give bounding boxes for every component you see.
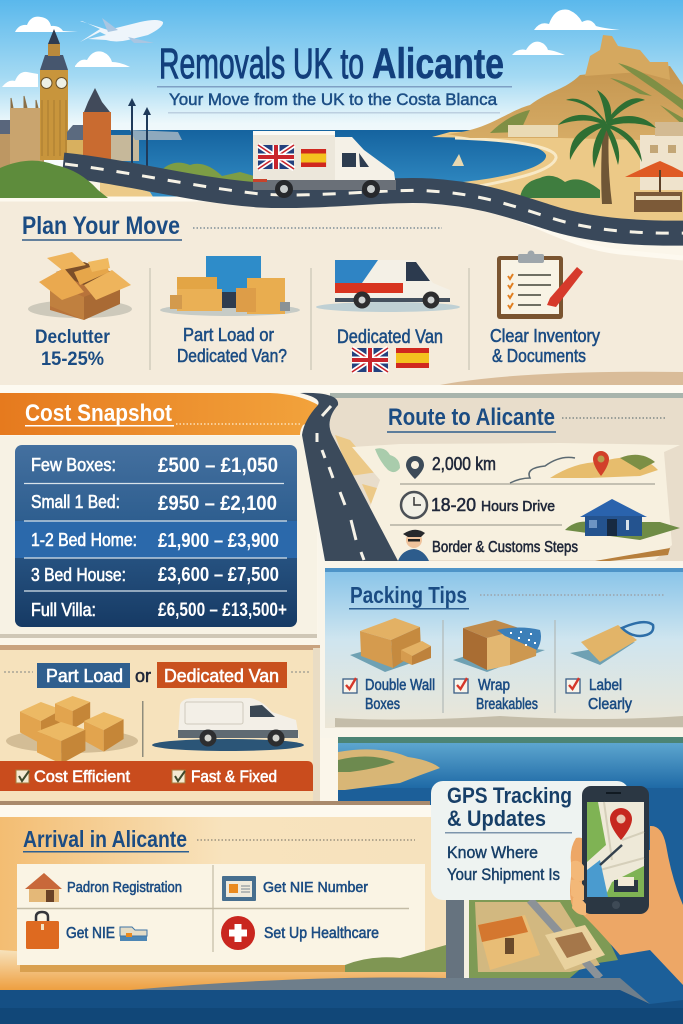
title: Alicante bbox=[372, 40, 504, 88]
item: declutter bbox=[28, 252, 132, 370]
item: part load or dedicated van: Dedicated Van? bbox=[177, 346, 287, 366]
row: 1-2 bed home: 1-2 Bed Home: bbox=[31, 530, 137, 550]
icon: umbrella and table bbox=[625, 161, 683, 212]
row: full villa: £6,500 – £13,500+ bbox=[158, 600, 287, 621]
step: padron registration bbox=[25, 873, 182, 902]
row: small 1 bed bbox=[31, 492, 277, 515]
item: dedicated van bbox=[316, 260, 460, 372]
tip: wrap breakables: Breakables bbox=[476, 696, 538, 713]
hill with castle bbox=[447, 35, 683, 180]
checkbox bbox=[454, 678, 468, 693]
item: clear inventory: & Documents bbox=[492, 346, 586, 366]
map patches bbox=[335, 435, 398, 520]
coast and aerial map scene bbox=[338, 737, 683, 1024]
road across hero bbox=[63, 164, 683, 233]
heading: Cost Snapshot bbox=[25, 400, 172, 427]
clouds bbox=[2, 10, 620, 87]
item: clear inventory bbox=[490, 250, 600, 366]
icon: white van bbox=[152, 698, 304, 751]
tip: label clearly: Label bbox=[589, 677, 622, 694]
vertical road bbox=[446, 900, 464, 978]
tip: wrap breakables: Wrap bbox=[478, 677, 510, 694]
orange banner bbox=[0, 393, 320, 435]
icon: clipboard bbox=[497, 250, 583, 319]
item: drive time bbox=[401, 492, 680, 540]
body text: Know Where bbox=[447, 843, 538, 862]
bushes mid bbox=[160, 163, 254, 186]
title: Removals UK to bbox=[159, 40, 364, 88]
subtitle: Your Move from the UK to the Costa Blanca bbox=[169, 90, 498, 109]
boat bbox=[452, 154, 464, 166]
item: drive time: 18-20 bbox=[431, 495, 476, 515]
panel: cost snapshot bbox=[0, 393, 320, 638]
body text bbox=[447, 843, 560, 884]
tip: wrap breakables bbox=[453, 620, 545, 713]
row: few boxes bbox=[31, 454, 278, 477]
icon: house bbox=[565, 499, 680, 540]
icon: small folder bbox=[120, 927, 147, 941]
row: 3 bed house: £3,600 – £7,500 bbox=[158, 564, 279, 586]
right column backdrop bbox=[318, 393, 683, 738]
icon: clock bbox=[401, 492, 427, 518]
hand bbox=[570, 826, 683, 985]
hand holding phone bbox=[570, 786, 683, 985]
step: get nie: Get NIE bbox=[66, 925, 115, 942]
highlighted row bbox=[15, 521, 297, 558]
icon: open box bbox=[28, 252, 132, 320]
icon: map pin bbox=[406, 456, 424, 479]
chip: dedicated van: Dedicated Van bbox=[164, 666, 279, 686]
hero scene bbox=[0, 0, 683, 235]
row: 1-2 bed home: £1,900 – £3,900 bbox=[158, 530, 279, 552]
panel background bbox=[0, 199, 683, 385]
sky bbox=[0, 0, 683, 172]
panel: plan your move bbox=[0, 199, 683, 385]
step: set up healthcare bbox=[221, 916, 379, 950]
title bbox=[157, 40, 512, 109]
tip: label clearly bbox=[566, 622, 653, 713]
icon: plane bbox=[80, 18, 163, 43]
panel: part load or dedicated van bbox=[0, 645, 430, 806]
row: 3 bed house bbox=[31, 564, 279, 586]
step: get nie number bbox=[222, 876, 368, 901]
icon: flags bbox=[352, 348, 429, 372]
icon: wrapped box bbox=[453, 620, 545, 672]
item: drive time: Hours Drive bbox=[481, 498, 555, 515]
or: or bbox=[135, 666, 151, 686]
cost table bbox=[15, 445, 297, 627]
step: set up healthcare: Set Up Healthcare bbox=[264, 925, 379, 942]
icon: customs officer bbox=[398, 530, 429, 561]
icon: luggage tag bbox=[570, 622, 653, 665]
item: fast and fixed: Fast & Fixed bbox=[191, 768, 277, 786]
checkbox bbox=[566, 678, 580, 693]
tip: double wall boxes bbox=[343, 618, 435, 713]
row: 1-2 bed home bbox=[31, 530, 279, 552]
benefits bar bbox=[0, 761, 313, 791]
bush left bbox=[0, 161, 108, 198]
icon: phone bbox=[582, 786, 649, 914]
item: customs bbox=[398, 530, 670, 561]
icon: cardboard boxes bbox=[350, 618, 431, 672]
icon: red white blue van bbox=[316, 260, 460, 312]
item: part load or dedicated van bbox=[160, 256, 300, 366]
tip: double wall boxes: Double Wall bbox=[365, 677, 435, 694]
icon: id card bbox=[222, 876, 256, 901]
heading: Route to Alicante bbox=[388, 404, 555, 431]
aerial houses bbox=[468, 900, 618, 978]
Big Ben and Westminster bbox=[0, 29, 182, 170]
heading: Arrival in Alicante bbox=[23, 826, 187, 852]
lamp posts bbox=[128, 98, 151, 167]
row: few boxes: Few Boxes: bbox=[31, 455, 116, 475]
map pin bbox=[610, 808, 632, 840]
icon: boxes and blue van bbox=[160, 256, 300, 316]
torn paper bbox=[352, 443, 680, 560]
panel: gps tracking bbox=[431, 781, 629, 900]
step: get nie bbox=[26, 912, 147, 949]
heading: Plan Your Move bbox=[22, 212, 180, 240]
icon: house bbox=[25, 873, 62, 902]
icon: briefcase bbox=[26, 912, 59, 949]
chip: dedicated van bbox=[157, 662, 287, 688]
row: 3 bed house: 3 Bed House: bbox=[31, 565, 126, 585]
chip: part load bbox=[37, 663, 130, 688]
item: distance bbox=[406, 451, 658, 483]
buildings right bbox=[640, 122, 683, 190]
green map blob bbox=[375, 448, 400, 472]
chip: part load: Part Load bbox=[46, 666, 123, 686]
item: cost efficient: Cost Efficient bbox=[34, 768, 130, 786]
row: few boxes: £500 – £1,050 bbox=[158, 454, 278, 477]
body text: Your Shipment Is bbox=[447, 865, 560, 884]
row: full villa bbox=[31, 600, 287, 621]
tip: double wall boxes: Boxes bbox=[365, 696, 400, 713]
icon: palm tree bbox=[558, 90, 656, 204]
road to route panel bbox=[300, 393, 398, 561]
sea bbox=[100, 130, 570, 210]
item: customs: Border & Customs Steps bbox=[432, 539, 578, 556]
heading: & Updates bbox=[447, 806, 546, 831]
footer sea band bbox=[0, 990, 683, 1024]
row: full villa: Full Villa: bbox=[31, 600, 96, 620]
checkbox bbox=[343, 678, 357, 693]
item: part load or dedicated van: Part Load or bbox=[183, 325, 274, 345]
heading: GPS Tracking bbox=[447, 783, 572, 808]
heading bbox=[447, 783, 572, 831]
item: dedicated van: Dedicated Van bbox=[337, 327, 443, 348]
row: small 1 bed: Small 1 Bed: bbox=[31, 492, 120, 512]
delivery truck bbox=[253, 131, 396, 198]
item: clear inventory: Clear Inventory bbox=[490, 326, 600, 346]
flag: UK bbox=[258, 145, 294, 169]
item: distance: 2,000 km bbox=[432, 454, 496, 474]
steps card bbox=[17, 864, 425, 965]
step: get nie number: Get NIE Number bbox=[263, 879, 368, 896]
tip: label clearly: Clearly bbox=[588, 696, 632, 713]
row: small 1 bed: £950 – £2,100 bbox=[158, 492, 277, 515]
fingers bbox=[571, 861, 586, 915]
item: declutter: 15-25% bbox=[41, 349, 104, 370]
panel: route to alicante bbox=[330, 393, 683, 561]
white separator band bbox=[0, 385, 683, 393]
item: declutter: Declutter bbox=[35, 327, 111, 348]
panel: arrival in alicante bbox=[0, 817, 650, 1004]
panel: packing tips bbox=[325, 568, 683, 728]
bushes right bbox=[520, 176, 600, 198]
step: padron registration: Padron Registration bbox=[67, 880, 182, 896]
beach bbox=[420, 130, 683, 235]
flag: Spain bbox=[301, 149, 326, 167]
icon: medical cross bbox=[221, 916, 255, 950]
mini map route bbox=[510, 451, 658, 483]
heading: Packing Tips bbox=[350, 582, 467, 608]
icon: box pile bbox=[6, 696, 138, 764]
